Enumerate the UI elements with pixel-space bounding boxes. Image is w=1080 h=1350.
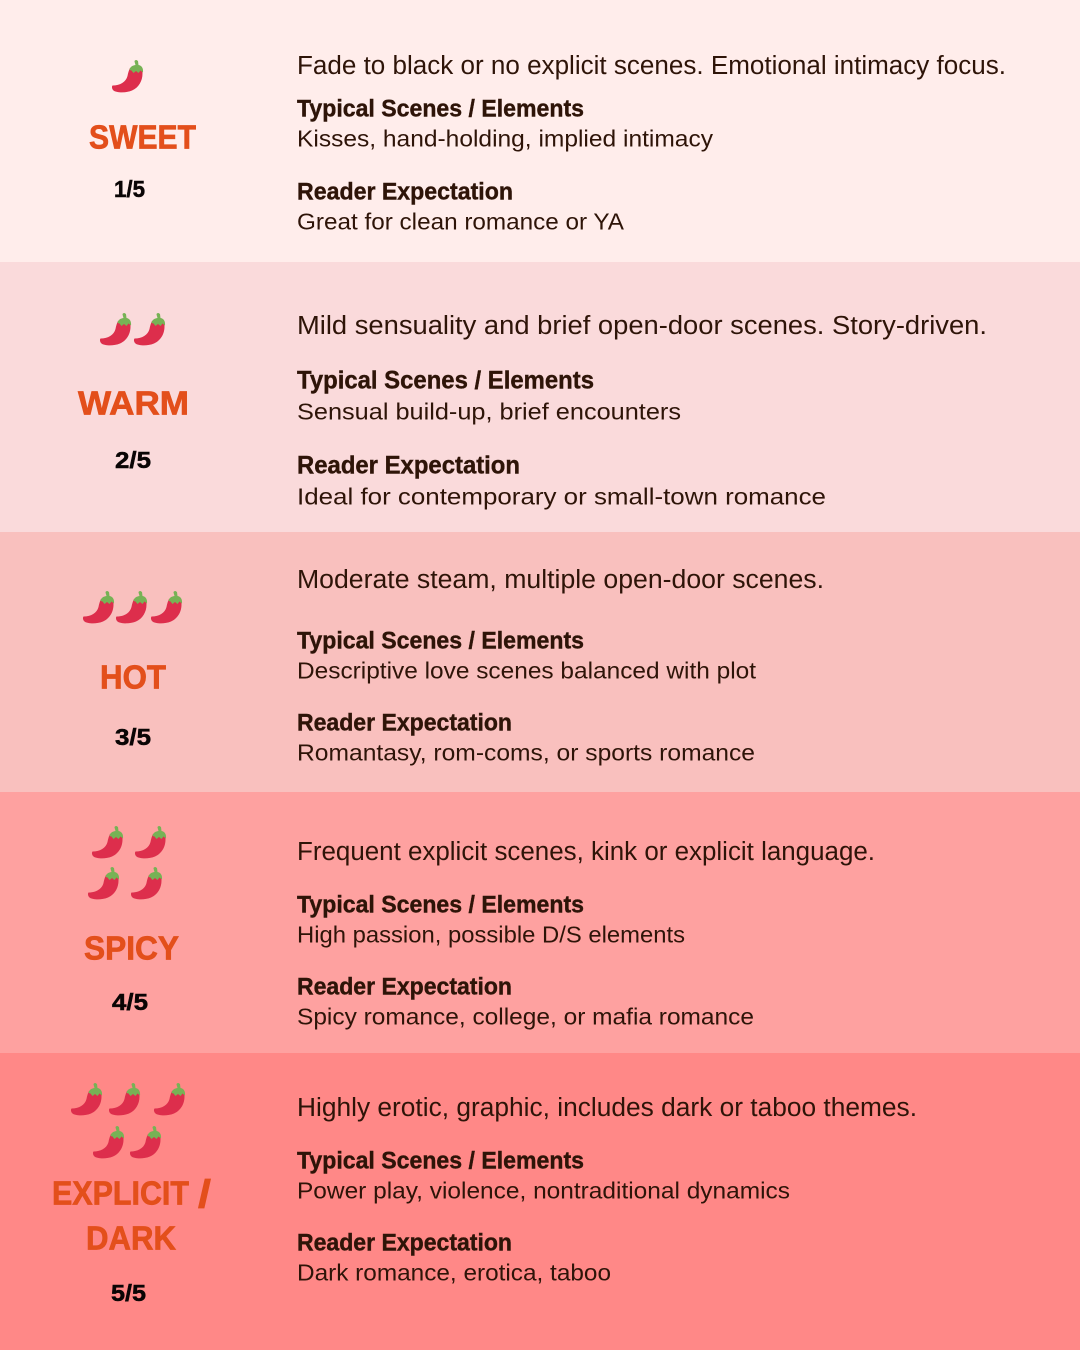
description: warm: Mild sensuality and brief open-door scenes. Story-driven.	[297, 312, 987, 340]
heading: reader expectation: Reader Expectation	[297, 1229, 512, 1256]
panel: warm	[0, 262, 1080, 532]
text: reader expectation: Great for clean romance or YA	[297, 208, 624, 234]
icon: two chilies	[100, 313, 165, 345]
description: explicit / dark: Highly erotic, graphic, includes dark or taboo themes.	[297, 1094, 917, 1122]
text: reader expectation: Spicy romance, college, or mafia romance	[297, 1003, 754, 1029]
description: spicy: Frequent explicit scenes, kink or explicit language.	[297, 838, 875, 866]
heading: spicy: SPICY	[84, 929, 179, 966]
description: sweet: Fade to black or no explicit scenes. Emotional intimacy focus.	[297, 52, 1006, 80]
heading: typical scenes: Typical Scenes / Elements	[297, 627, 584, 654]
rating: 3/5: 3/5	[115, 724, 151, 750]
rating: 5/5: 5/5	[111, 1280, 146, 1306]
icon: four chilies	[88, 826, 166, 899]
heading: sweet: SWEET	[89, 118, 196, 155]
heading: typical scenes: Typical Scenes / Elements	[297, 95, 584, 122]
text: typical scenes: High passion, possible D/S elements	[297, 921, 685, 947]
text: typical scenes: Descriptive love scenes balanced with plot	[297, 657, 756, 683]
heading: reader expectation: Reader Expectation	[297, 451, 520, 479]
heading: explicit / dark	[52, 1173, 211, 1256]
panel: sweet	[0, 0, 1080, 262]
heading: typical scenes: Typical Scenes / Elements	[297, 1147, 584, 1174]
description: hot: Moderate steam, multiple open-door scenes.	[297, 566, 824, 594]
panel: hot	[0, 532, 1080, 792]
rating: 1/5: 1/5	[114, 176, 145, 202]
heading: hot: HOT	[100, 658, 166, 695]
panel: explicit / dark	[0, 1053, 1080, 1350]
icon: three chilies	[83, 591, 182, 623]
text: reader expectation: Dark romance, erotica, taboo	[297, 1259, 611, 1285]
icon: one chili	[112, 60, 143, 92]
icon: five chilies	[71, 1083, 185, 1158]
heading: reader expectation: Reader Expectation	[297, 178, 513, 205]
heading: reader expectation: Reader Expectation	[297, 973, 512, 1000]
heading: typical scenes: Typical Scenes / Elements	[297, 891, 584, 918]
text: typical scenes: Kisses, hand-holding, implied intimacy	[297, 125, 713, 151]
heading: explicit / dark: /	[198, 1173, 211, 1216]
text: typical scenes: Power play, violence, nontraditional dynamics	[297, 1177, 790, 1203]
rating: 4/5: 4/5	[112, 989, 148, 1015]
rating: 2/5: 2/5	[115, 447, 151, 473]
heading: typical scenes: Typical Scenes / Elements	[297, 366, 594, 394]
heading: explicit / dark: DARK	[86, 1219, 176, 1256]
heading: reader expectation: Reader Expectation	[297, 709, 512, 736]
heading: explicit / dark: EXPLICIT	[52, 1174, 189, 1211]
text: typical scenes: Sensual build-up, brief encounters	[297, 398, 681, 424]
text: reader expectation: Romantasy, rom-coms, or sports romance	[297, 739, 755, 765]
text: reader expectation: Ideal for contemporary or small-town romance	[297, 483, 826, 509]
heading: warm: WARM	[78, 384, 189, 421]
panel: spicy	[0, 792, 1080, 1053]
